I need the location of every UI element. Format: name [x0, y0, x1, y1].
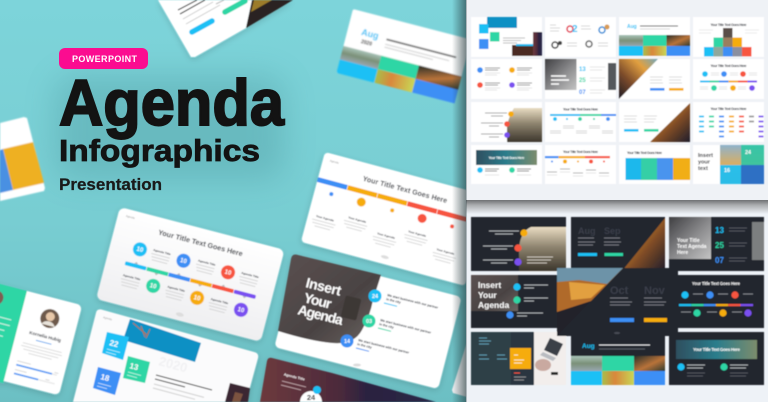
thumbnail: insert your text: your [698, 160, 711, 166]
top date markers: 10 [136, 247, 144, 254]
light and dark slide panel [466, 0, 768, 402]
date badge 24 [300, 386, 322, 402]
dark thumbnail: circle timeline [669, 275, 764, 328]
dark thumbnail: Aug image tiles [571, 332, 665, 385]
agenda entries: We start business with our partner [358, 338, 410, 355]
teal background [0, 0, 468, 402]
dark thumbnail: Aug image tiles: Aug [582, 343, 595, 350]
dark thumbnail: photo with numbers: 25 [715, 241, 724, 250]
timeline bar [124, 259, 257, 301]
ferris wheel photo [123, 319, 201, 362]
soft shadow behind title [55, 75, 285, 180]
agenda labels [315, 205, 458, 256]
thumbnail: pyramid tiles: Your Title Text Goes Here [710, 23, 747, 27]
date card 22 [102, 332, 129, 360]
slide: days image tiles at upper right: Aug [360, 27, 380, 41]
agenda entries: 14 [344, 339, 351, 345]
badge: POWERPOINT [59, 48, 148, 69]
thumbnail: insert your text: 24 [745, 150, 752, 156]
date card 22: 22 [108, 338, 120, 349]
thumbnail: image tiles: Aug [627, 24, 637, 30]
date badge 24: 24 [307, 393, 316, 402]
agenda entries: We start business with our partner [380, 318, 432, 335]
date card 18: 18 [99, 372, 111, 383]
bottom date markers: 10 [237, 307, 245, 315]
photo headline: Agenda [296, 301, 345, 328]
agenda entries: in the city [386, 297, 401, 305]
dark thumbnail: Aug and Sep: Aug [578, 226, 596, 236]
thumbnail: triangle city photo left [619, 59, 690, 99]
agenda entries: 03 [366, 319, 372, 325]
heading: Agenda: Agenda [59, 66, 285, 139]
thumbnail: insert your text [693, 145, 764, 184]
dark thumbnail: Insert Your Agenda [471, 275, 566, 328]
dark thumbnail: Aug and Sep [571, 217, 665, 271]
slide: days image tiles at upper right [336, 9, 471, 103]
dark slide thumbnails [471, 217, 764, 385]
profile photo [38, 307, 61, 330]
colored header steps [317, 177, 468, 222]
faint year label: 2020 [157, 353, 189, 375]
agenda labels: Your Agenda [315, 214, 335, 223]
slide: left edge photo slide [0, 117, 45, 201]
dark thumbnail: Aug and Sep: Sep [604, 226, 621, 236]
agenda labels: Agenda Title [122, 273, 141, 281]
thumbnail: insert your text: 16 [724, 168, 730, 174]
agenda entries [340, 290, 439, 355]
heading: Infographics: Infographics [59, 133, 260, 168]
agenda labels: Agenda Title [153, 248, 172, 256]
thumbnail: schedule columns [693, 102, 764, 142]
thumbnail: triangle city photo right [619, 102, 690, 142]
thumbnail: three colour timeline [545, 102, 616, 142]
thumbnail: three colour timeline: Your Title Text Goes Here [563, 108, 598, 112]
slide title: Your Title Text Goes Here [362, 176, 448, 205]
thumbnail: monochrome photo numbers [545, 59, 616, 99]
photo headline: Insert [304, 274, 343, 299]
progress bars [14, 361, 59, 384]
dark featured slide: Oct and Nov [557, 268, 678, 336]
step markers [328, 189, 455, 231]
thumbnail: insert your text: text [698, 166, 708, 172]
slide: photo with date badge [260, 358, 436, 402]
agenda labels: Your Agenda [377, 231, 396, 240]
slide: 2020 calendar cards: Agenda [103, 315, 113, 321]
thumbnail: circle timeline [693, 59, 764, 99]
dark thumbnail: photo with numbers: 07 [715, 256, 724, 265]
bottom date markers: 10 [149, 283, 158, 291]
thumbnail: banner with two bullets [471, 145, 542, 184]
bottom date markers: 10 [193, 295, 201, 303]
thumbnail: sunset photo with bullets [471, 102, 542, 142]
dark thumbnail: Insert Your Agenda: Your [478, 290, 497, 300]
thumbnail: circle timeline: Your Title Text Goes Here [710, 64, 747, 68]
dark thumbnail: laptop photo [471, 332, 566, 385]
thumbnail: product icons: 2 [572, 24, 578, 35]
slide: profile card [0, 281, 82, 397]
agenda labels: Your Agenda [408, 229, 427, 238]
thumbnail: monochrome photo numbers: 13 [579, 67, 586, 73]
slide: white sliver at panel edge [452, 342, 467, 397]
slide: header timeline agenda [301, 152, 489, 286]
slide: timeline agenda [96, 207, 285, 342]
thumbnail: image tiles [619, 17, 690, 57]
dark thumbnail: banner with bullets [669, 332, 764, 385]
thumbnail: banner with two bullets: Your Title Text Goes Here [488, 156, 525, 160]
dark thumbnail: photo with numbers: Your Title [677, 238, 700, 244]
slide: top tilted agenda slide [158, 0, 293, 57]
bottom date markers [144, 277, 250, 318]
slide: Insert Your Agenda [274, 254, 462, 389]
top date markers: 10 [224, 270, 232, 277]
dark thumbnail: Insert Your Agenda: Agenda [478, 300, 509, 310]
dark thumbnail: circle timeline: Your Title Text Goes Here [692, 281, 741, 286]
dark thumbnail: photo with numbers: Here [677, 250, 688, 256]
slide title: Your Title Text Goes Here [157, 228, 244, 258]
agenda entries: 24 [372, 294, 379, 300]
slide: 2020 calendar cards [73, 309, 258, 402]
date card 13: 13 [128, 361, 140, 372]
thumbnail: monochrome photo numbers: 25 [579, 78, 586, 84]
date card 13 [123, 356, 150, 383]
body text [155, 375, 212, 390]
thumbnail: header timeline [545, 145, 616, 184]
room photo [278, 254, 381, 343]
top date markers: 10 [179, 258, 188, 266]
agenda labels: Agenda Title [241, 271, 260, 279]
thumbnail: insert your text: Insert [698, 153, 713, 159]
thumbnail: colored pillars: Your Title Text Goes Here [627, 151, 662, 155]
thumbnail: four bullet points [471, 59, 542, 99]
panel edge shadow [452, 0, 466, 402]
profile name: Kornelia Hubig [29, 330, 62, 343]
light slide thumbnails [471, 17, 764, 184]
date card 18 [93, 367, 121, 395]
dark thumbnail: photo with numbers: 13 [715, 226, 724, 235]
top date markers [131, 241, 237, 281]
agenda entries: We start business with our partner [387, 293, 439, 310]
thumbnail: pyramid tiles [693, 17, 764, 57]
dark thumbnail: Insert Your Agenda: Insert [478, 280, 501, 290]
agenda entries: in the city [357, 342, 372, 350]
heading: Presentation: Presentation [59, 176, 162, 194]
photo headline: Your [302, 289, 334, 312]
thumbnail: colored pillars [619, 145, 690, 184]
dark thumbnail: banner with bullets: Your Title Text Goes Here [693, 347, 740, 352]
photo headline [296, 274, 345, 328]
agenda labels [122, 241, 260, 311]
agenda entries: in the city [379, 322, 394, 330]
thumbnail: schedule columns: Your Title Text Goes Here [710, 107, 747, 111]
dark featured slide: Oct and Nov: Oct [610, 285, 629, 297]
agenda labels: Agenda Title [198, 258, 216, 267]
agenda labels: Agenda Title [167, 285, 186, 293]
agenda labels: Your Agenda [436, 247, 455, 256]
thumbnail: header timeline: Your Title Text Goes Here [563, 150, 598, 154]
dark featured slide: Oct and Nov: Nov [644, 285, 666, 297]
dark thumbnail: photo with numbers: Text Agenda [677, 244, 707, 250]
dark thumbnail: sunset bullets [471, 217, 566, 271]
thumbnail: monochrome photo numbers: 07 [579, 90, 586, 96]
dark thumbnail: photo with numbers [669, 217, 764, 271]
thumbnail: dates with photos [471, 17, 542, 57]
thumbnail: product icons [545, 17, 616, 57]
badge: POWERPOINT: POWERPOINT [72, 54, 138, 64]
dark photo corner [225, 383, 250, 402]
agenda labels: Agenda Title [210, 297, 229, 305]
slide: header timeline agenda: Agenda [329, 159, 340, 165]
slide: timeline agenda: Agenda [125, 214, 136, 220]
agenda labels: Your Agenda [348, 215, 367, 224]
slide: photo with date badge: Agenda Title [283, 372, 305, 382]
slide: days image tiles at upper right: 2020 [360, 39, 373, 48]
